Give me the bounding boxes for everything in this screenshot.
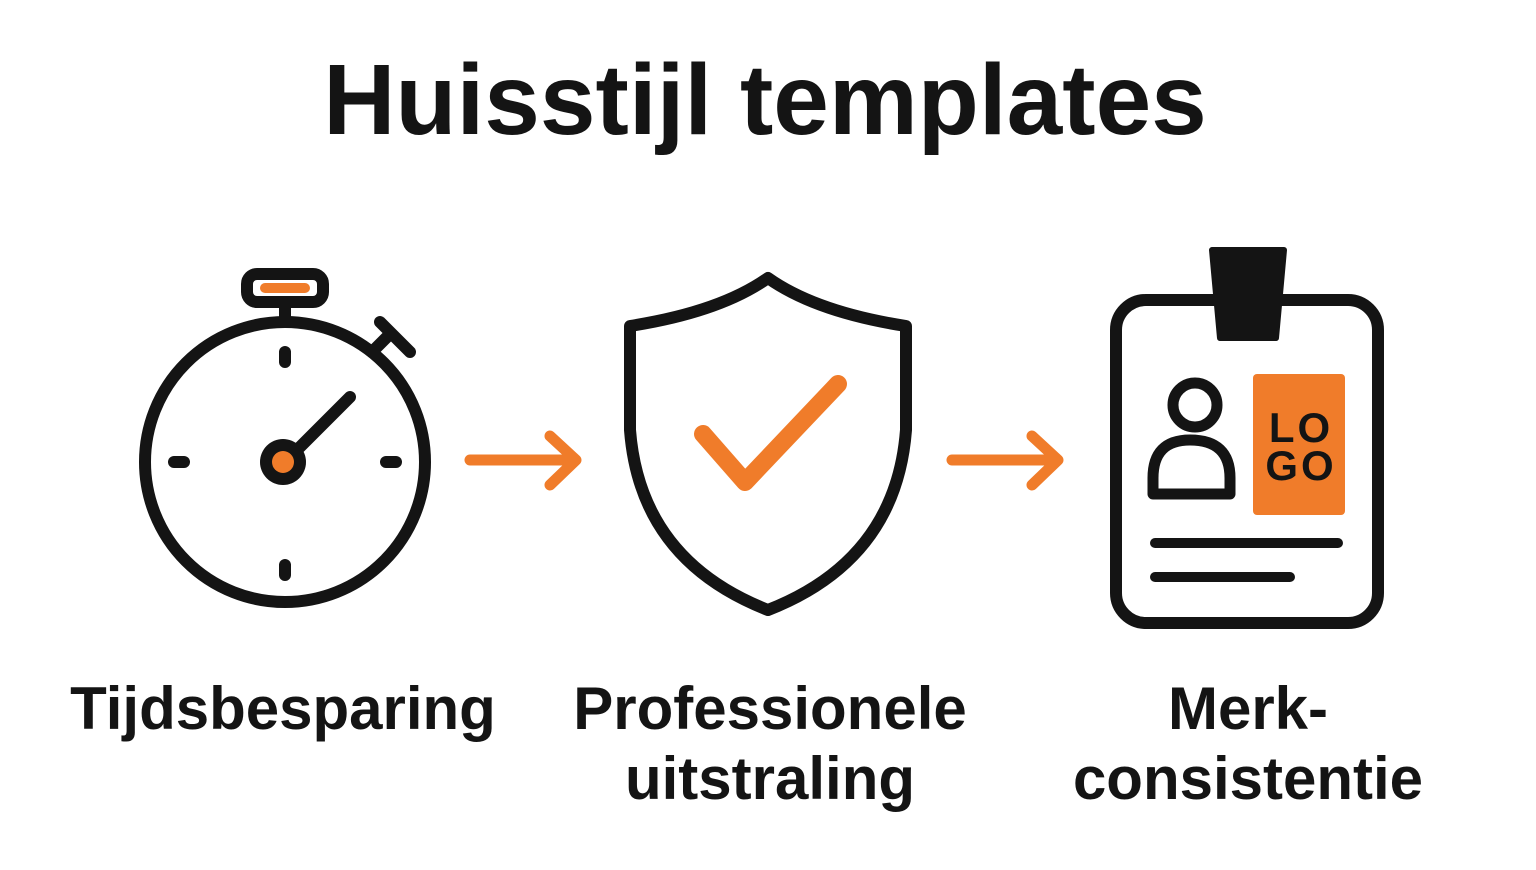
icon: stopwatch <box>145 274 425 602</box>
label: Merk-consistentie: Merk- <box>1168 675 1328 742</box>
label: Professionele uitstraling: Professionele <box>573 675 967 742</box>
icon: shield with check <box>630 278 906 610</box>
arrow 2 <box>952 436 1058 485</box>
label: Merk-consistentie <box>1073 675 1423 812</box>
icon: ID badge <box>1116 250 1378 623</box>
title: Huisstijl templates <box>323 44 1207 156</box>
label: Professionele uitstraling <box>573 675 967 812</box>
label: Merk-consistentie: consistentie <box>1073 745 1423 812</box>
label: Tijdsbesparing: Tijdsbesparing <box>70 675 496 742</box>
arrow 1 <box>470 436 576 485</box>
icon: ID badge: LO <box>1269 404 1333 451</box>
icon: ID badge: GO <box>1265 442 1337 489</box>
label: Professionele uitstraling: uitstraling <box>625 745 915 812</box>
